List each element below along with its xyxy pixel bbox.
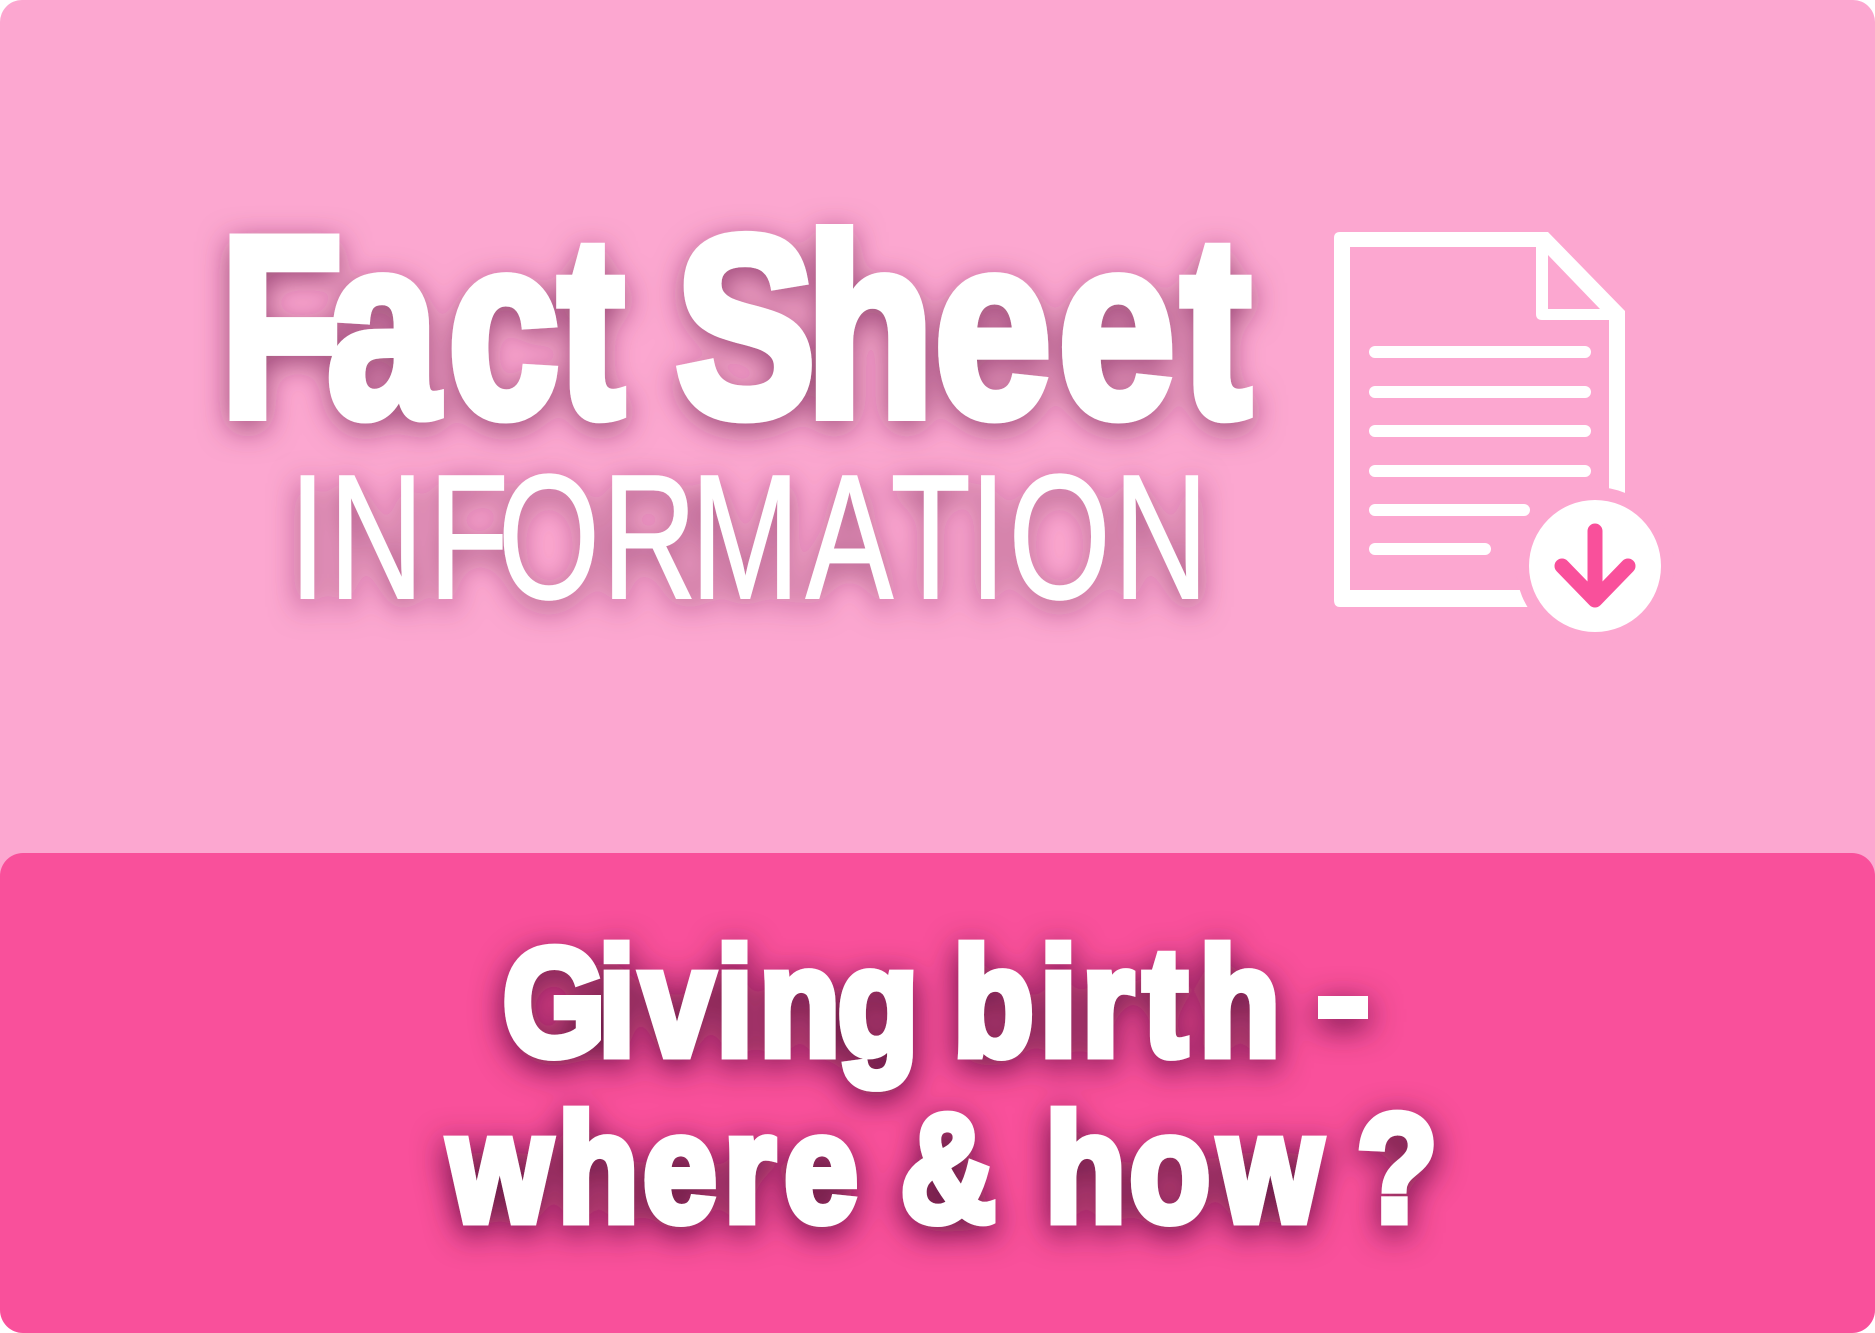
panel: bottom dark pink	[0, 853, 1875, 1333]
heading: Giving birth - where & how ?: where	[448, 1084, 858, 1254]
document outline	[1334, 232, 1625, 607]
heading: Giving birth - where & how ?: birth	[953, 918, 1280, 1088]
document text lines	[1375, 352, 1585, 549]
heading: Giving birth - where & how ?: how	[1045, 1084, 1323, 1254]
title: Fact Sheet: Sheet	[675, 182, 1251, 471]
heading: Giving birth - where & how ?	[448, 918, 1437, 1254]
heading: Giving birth - where & how ?: Giving	[503, 918, 918, 1088]
panel: top light pink	[0, 0, 1875, 900]
icon: document with download arrow	[1334, 232, 1674, 645]
title: Fact Sheet	[220, 182, 1251, 472]
title: Fact Sheet: Fact	[220, 184, 625, 472]
heading: Giving birth - where & how ?: ?	[1357, 1084, 1437, 1254]
subtitle: INFORMATION: INFORMATION	[289, 438, 1208, 636]
heading: Giving birth - where & how ?: &	[901, 1084, 996, 1254]
download badge	[1516, 487, 1674, 645]
